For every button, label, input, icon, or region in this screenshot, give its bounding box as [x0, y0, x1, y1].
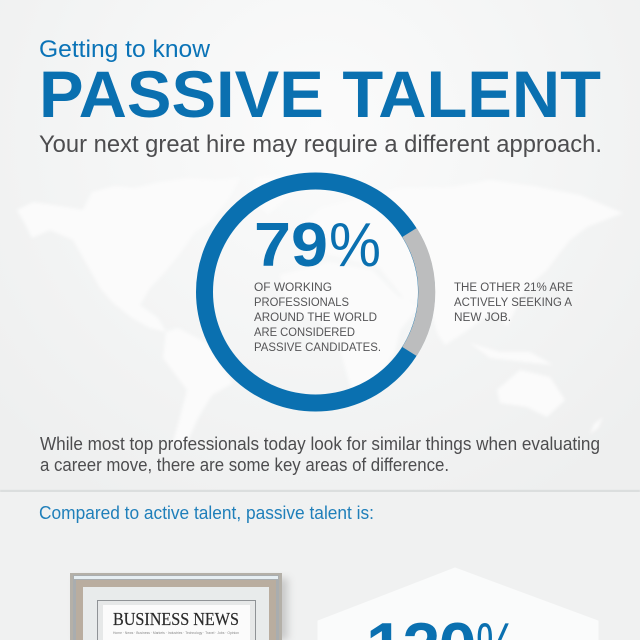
passive candidates description: ARE CONSIDERED [254, 325, 355, 339]
passive candidates description: OF WORKING [254, 280, 332, 294]
world map [17, 174, 623, 445]
newspaper headline: BUSINESS NEWS [113, 609, 239, 629]
main title: PASSIVE TALENT [39, 57, 601, 131]
passive candidates description: PROFESSIONALS [254, 295, 349, 309]
active seekers note: NEW JOB. [454, 310, 511, 324]
active seekers note [454, 280, 573, 324]
passive candidates description [254, 280, 381, 354]
passive candidates description: PASSIVE CANDIDATES. [254, 340, 381, 354]
hexagon stat panel [318, 568, 598, 640]
lower section background [0, 492, 640, 640]
79 percent figure [254, 211, 381, 280]
intro paragraph: While most top professionals today look for similar things when evaluating [40, 433, 600, 454]
section heading: Compared to active talent, passive talent is: [39, 503, 374, 523]
newspaper nav: Home · News · Business · Markets · Industries · Technology · Travel · Jobs · Opinion [113, 631, 239, 635]
intro paragraph [40, 433, 600, 475]
passive candidates description: AROUND THE WORLD [254, 310, 377, 324]
divider [0, 490, 640, 492]
79 percent figure: 79 [254, 211, 328, 280]
framed newspaper [70, 573, 288, 640]
donut chart [204, 181, 427, 403]
active seekers note: ACTIVELY SEEKING A [454, 295, 573, 309]
grey arc: active share [410, 232, 427, 352]
eyebrow heading: Getting to know [39, 36, 211, 63]
79 percent figure: % [329, 211, 381, 280]
intro paragraph: a career move, there are some key areas of difference. [40, 454, 449, 475]
active seekers note: THE OTHER 21% ARE [454, 280, 573, 294]
subtitle: Your next great hire may require a different approach. [39, 131, 602, 158]
